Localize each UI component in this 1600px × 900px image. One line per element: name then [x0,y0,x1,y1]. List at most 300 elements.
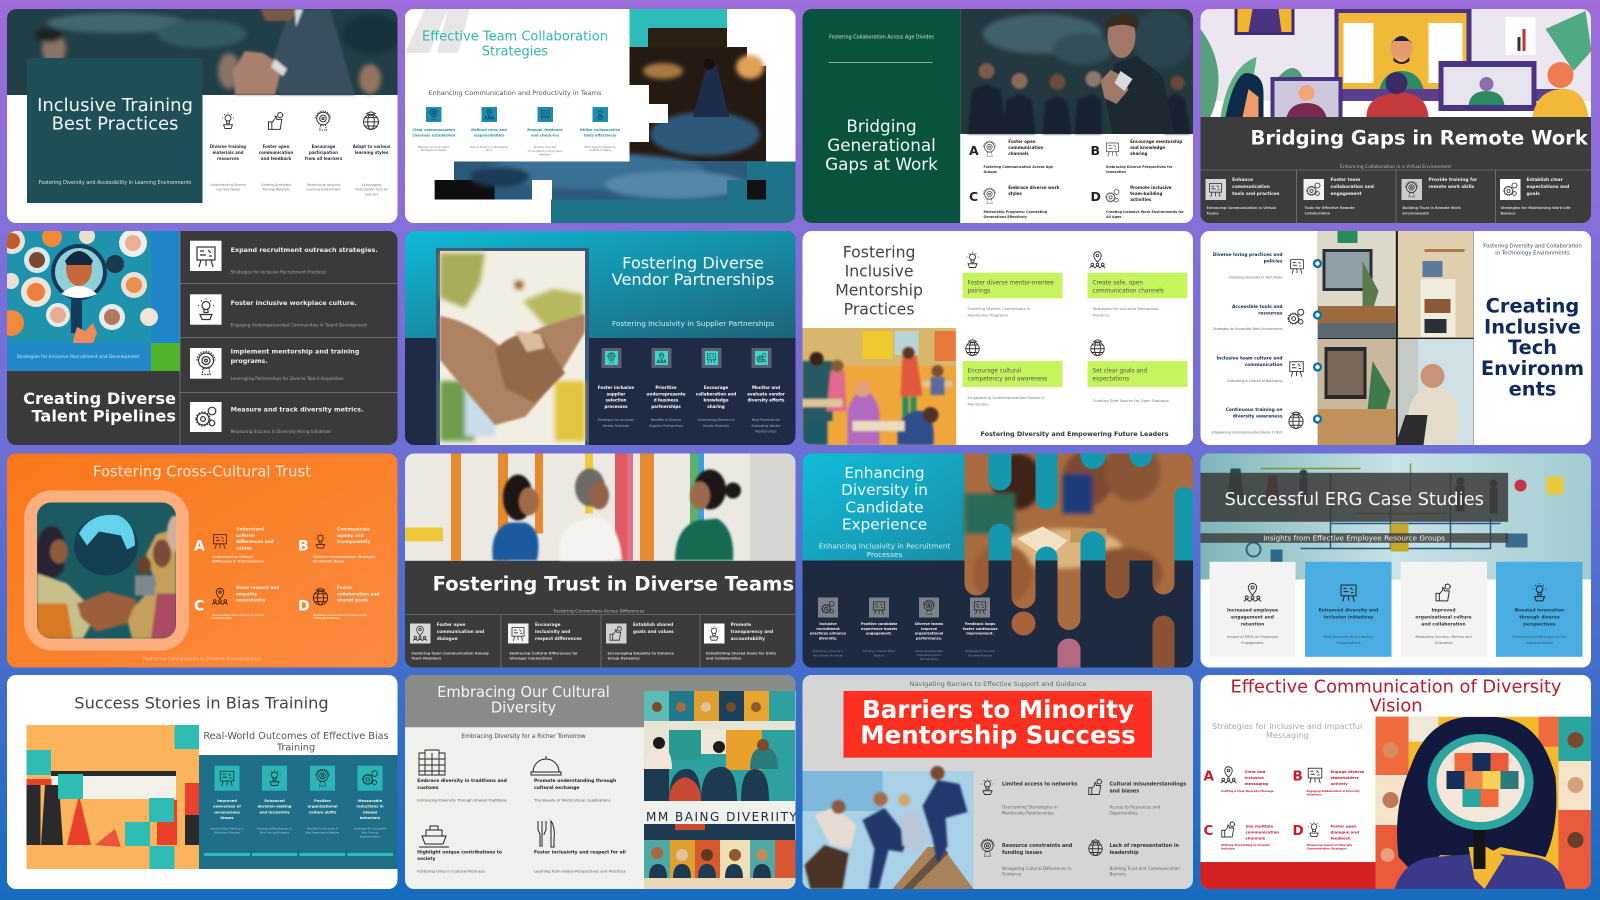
title: Generational [827,135,936,155]
heading: inclusion initiatives [1324,615,1374,621]
note: All Ages [1106,215,1121,219]
heading: and biases [1110,788,1139,794]
title banner [844,691,1152,758]
note: Effective Communication Strategies [313,555,376,559]
item: decision-making [252,766,297,856]
marker [1314,364,1321,370]
note: Mentorship Relationships [1002,810,1053,816]
heading: Foster open [1008,139,1036,144]
icon tile [1500,179,1520,200]
subtitle: Fostering Diversity and Accessibility in Learning Environments [39,180,192,186]
heading: cultural [236,533,255,539]
heading: Improved [217,799,237,803]
heading: through diverse [1519,615,1560,621]
note: Strategies for Inclusive Mentorship [1092,306,1159,311]
item: supplier selection [598,348,634,428]
heading: knowledge [703,398,729,403]
note: Practices [1092,312,1110,317]
marker [1314,416,1321,422]
heading: Increased employee [1227,608,1278,614]
item D [1090,185,1184,219]
heading: Expand recruitment outreach strategies. [231,246,378,254]
icon [212,588,228,605]
note: Group Dynamics [608,657,640,661]
note: Teams [1206,212,1219,216]
heading: Positive [314,799,331,803]
item: safe channels [1088,252,1188,317]
label bar [1088,361,1188,387]
note: Generations Effectively [984,215,1028,219]
note: Barriers [1110,872,1126,877]
icon: fork and knife [538,821,554,847]
outcomes panel [199,755,398,869]
icon [315,533,326,548]
heading: retention [1241,622,1264,628]
heading: tools and practices [1232,191,1280,197]
heading: awareness of [213,805,241,809]
icon [1436,583,1451,601]
note: Strategies for Successful [354,826,386,830]
item: open communication [259,112,293,192]
icon [1290,362,1303,377]
note: Evaluating Vendor [751,424,781,428]
note: Strategies for Accessible Work Environments [1213,327,1283,331]
item C [969,185,1060,219]
heading: Embrace diversity in traditions and [417,778,507,784]
heading: Embrace diverse work [1008,185,1060,190]
note: Building Long-lasting Relationships [313,613,367,617]
heading: Foster open [1330,824,1357,828]
text: channels established [412,133,455,137]
label bar [962,273,1062,298]
title: Environm [1481,357,1584,380]
heading: practices enhance [810,632,847,636]
heading: Improved [1431,608,1456,614]
note: Learning Environment [306,188,341,192]
note: Learning Needs [216,188,240,192]
image: professionals climbing stairs [802,766,974,889]
heading: Provide training for [1428,177,1478,183]
icon: ship [419,826,449,847]
grid lines [405,614,796,668]
item: reduced biased behaviors [348,766,393,856]
heading: underrepresente [647,391,686,396]
heading: engagement [1330,191,1362,197]
heading: communication and [437,629,484,635]
heading: diversity. [819,636,837,640]
letter: C [969,189,978,204]
heading: team-building [1130,191,1162,196]
heading: channels [1246,836,1266,840]
title: Embracing Our Cultural [437,684,610,701]
kicker: in Technology Environments [1495,250,1570,256]
grid lines [1200,170,1592,223]
heading: transparency and [731,629,773,635]
heading: biased [363,810,377,814]
note: Collaboration [1304,212,1331,216]
note: Embracing Diversity Through Shared Traditions [417,798,507,802]
note: Accountability Among Team [528,149,563,153]
heading: Show respect and [236,585,279,591]
label bar: Create safe, open [1092,280,1143,286]
icon [1091,340,1104,356]
band: subtitle strip: Strategies for Inclusive Recruitment and Development [17,354,139,360]
text: participation [309,150,338,155]
note: Empowering Underrepresented Voices in Tech [1212,430,1283,434]
note: Strategies for Inclusive [965,649,995,653]
note: Enhancing Inclusivity in [813,649,844,653]
title: Best Practices [52,114,178,135]
left title panel [802,9,960,223]
text: communication [259,150,293,155]
panel: Effective Communication of Diversity Vision [1200,675,1592,890]
icon tile [606,624,626,644]
item: adapt to learning styles [353,112,391,196]
letter: B [298,538,309,554]
note: Building Trust in Remote Work [1402,206,1462,210]
panel: Successful ERG Case Studies [1200,454,1592,668]
item: unique contributions [417,826,502,874]
item: misunderstandings [1089,779,1186,816]
item D [1292,822,1359,850]
icon [1244,583,1261,602]
heading: communication [1232,184,1270,190]
image frame [24,490,189,650]
heading: organizational [308,805,337,809]
note: Understanding Cultural [212,555,253,559]
note: Collaboration [212,616,232,620]
heading: biases [220,816,234,820]
heading: dialogue and [1330,830,1359,834]
subtitle: Real-World Outcomes of Effective Bias [203,731,389,742]
icon tile [310,766,335,791]
note: Organizations [1336,641,1361,645]
divider [828,61,932,64]
icon tile [358,766,382,791]
subtitle band [1200,533,1508,543]
illustration: woman with magnifier over faces [1376,717,1592,890]
note: Learning from Global Perspectives and Practices [534,868,626,874]
marker [1314,312,1321,318]
accent bar [348,853,393,856]
heading: Highlight unique contributions to [417,850,502,856]
heading: differences and [236,539,274,545]
heading: Clear and [1244,769,1266,774]
card: boosted innovation [1496,562,1582,657]
icon tile [508,624,528,644]
accent bar [252,853,297,856]
note: Through Empathy [313,616,340,620]
letter: B [1292,768,1303,784]
subtitle: Embracing Diversity for a Richer Tomorrow [461,734,586,740]
heading: partnerships [651,404,681,409]
heading: Communicate [337,526,370,532]
icon tile [190,241,222,271]
heading: dialogue [437,636,458,642]
kicker: Fostering Collaboration Across Age Divides [829,34,934,40]
heading: inclusivity and [535,629,570,635]
subtitle: Enhancing Communication and Productivity in Teams [429,89,602,97]
note: Creating Accessible [261,183,291,187]
heading: Encourage [704,385,728,390]
heading: Enhanced [264,799,285,803]
heading: recruitment [816,627,840,631]
title: Candidate [845,498,924,516]
note: Engaging Underrepresented Communities in Talent Development [231,322,367,328]
heading: Encourage mentorship [1130,139,1182,144]
icon tile [869,598,889,618]
grid lines [180,231,398,445]
note: Implementation [1526,641,1553,645]
heading: Foster team [1330,177,1361,183]
note: Strategies for Maintaining Work-Life [1500,206,1571,210]
marker [1314,260,1321,267]
label bar: competency and awareness [968,376,1047,382]
icon [1341,585,1356,602]
note: Outcomes [1435,641,1453,645]
note: Innovation [1106,170,1127,174]
icon [1291,260,1303,274]
icon tile [190,294,222,325]
item: accessible tools [1213,304,1321,331]
header band [405,675,796,727]
icon [981,839,994,856]
item A [1204,767,1274,793]
note: Learners [365,192,379,196]
heading: Enhance [1232,177,1253,183]
label bar: expectations [1092,376,1129,382]
label bar: pairings [968,288,990,294]
panel: Enhancing Diversity in Candidate Experience [802,442,1194,678]
item: access to networks [982,779,1077,816]
heading: communication [1246,830,1279,834]
item: recruitment practices [810,598,847,657]
text: Clear communication [412,128,455,132]
heading: customs [417,785,439,791]
note: Fostering Communication Across Age [984,165,1054,169]
heading: shared goals [337,598,369,604]
heading: supplier [607,391,625,396]
heading: improve [921,627,938,631]
heading: channels [1008,151,1029,156]
heading: Monitor and [752,385,780,390]
text: responsibilities [473,133,505,137]
heading: consistently [236,598,266,604]
heading: engagement and [1231,615,1274,621]
note: Overcoming Stereotypes to Foster [212,613,265,617]
item: collaborative tools [580,107,621,152]
item: shared goals [606,622,675,661]
heading: Inclusive team culture and [1217,356,1282,362]
item: monitor efforts [747,348,785,434]
title: Inclusive [1484,315,1581,338]
heading: behaviors [360,816,381,820]
note: Differences in Trust Dynamics [212,559,264,563]
subtitle: Enhancing Collaboration in a Virtual Environment [1340,164,1451,170]
heading: unconscious [214,810,241,814]
note: Demographics [920,657,939,661]
heading: Cultural misunderstandings [1110,782,1186,788]
letter: A [969,143,979,158]
heading: foster continuous [963,627,998,631]
item: diverse teams [915,598,943,661]
heading: Continuous training on [1226,407,1282,413]
text: learning styles [355,150,389,155]
item: candidate experience [861,598,898,657]
icon [214,535,226,549]
heading: leadership [1110,850,1139,856]
note: Recruitment Processes [813,653,843,657]
note: Conflicts in Teams [589,148,612,152]
text: and check-ins [531,133,559,137]
icon tile [919,598,939,618]
icon: service bell [531,756,561,775]
heading: decision-making [257,805,292,809]
panel: Effective Team Collaboration Strategies [405,9,796,224]
title: Gaps at Work [825,154,938,174]
note: Mentorship Programs: Connecting [984,210,1048,214]
item: cultural competency [962,340,1062,406]
heading: Foster open [437,622,466,628]
heading: openly and [337,533,364,539]
note: Members [539,153,551,157]
note: Team Members [412,657,441,661]
icon [1090,252,1105,268]
item: cultural exchange [531,756,616,802]
heading: messaging [1244,781,1268,786]
heading: Accessible tools and [1232,304,1282,310]
heading: diversity awareness [1233,413,1283,419]
heading: communication [1008,145,1044,150]
decorative quote mark [405,9,470,53]
note: Embracing Cultural Differences for [510,651,578,655]
heading: organizational culture [1415,615,1472,621]
heading: reductions in [356,805,384,809]
heading: cultural exchange [534,785,579,791]
note: Engagement [1241,641,1264,645]
note: Impact of ERGs on Employee [1227,635,1278,639]
note: Fostering Diversity in Tech Roles [1229,276,1283,280]
item: team collaboration [1304,177,1374,216]
item: diverse training materials [210,113,246,192]
icon: building [419,750,445,775]
icon tile [482,107,497,122]
subtitle: Fostering Inclusivity in Supplier Partnerships [612,319,774,328]
title: Fostering Diverse [622,254,764,272]
text: materials and [212,150,244,155]
item: inclusivity [508,622,582,661]
heading: perspectives [1523,622,1556,628]
heading: Promote inclusive [1130,185,1172,190]
title: Success Stories in Bias Training [74,694,329,712]
heading: and inclusivity [259,810,290,814]
note: Enhancing Communication in Virtual [1206,206,1276,210]
panel: Inclusive Training Best Practices [7,9,402,223]
icon [1221,767,1236,783]
heading: culture shifts [309,810,337,814]
heading: Prioritize [655,385,677,390]
heading: stakeholders [1330,775,1360,780]
heading: Implement mentorship and training [231,347,360,355]
item: defined roles [470,107,509,152]
heading: Diverse hiring practices and [1213,252,1282,258]
note: Vendor Selection [603,424,629,428]
note: Measuring Impact of Diversity [1306,843,1353,847]
item: open dialogue [410,622,489,661]
card: diversity initiatives [1305,562,1392,657]
label bar [962,361,1062,387]
note: Initiatives [1306,792,1322,796]
heading: collaboration and [1330,184,1374,190]
icon: thumb [268,112,284,129]
heading: Foster inclusive workplace culture. [231,299,357,307]
heading: Feedback loops [965,622,995,626]
subtitle: Training [276,743,315,754]
note: Groups [984,170,997,174]
note: Vendor Diversity [703,424,729,428]
note: Measuring Success: Metrics and [1415,635,1472,639]
panel: Bridging Gaps in Remote Work [1200,9,1592,223]
item B [1090,139,1182,174]
row: expand outreach [190,241,378,274]
heading: accountability [731,636,765,642]
note: Fostering Unity in Cultural Richness [417,868,485,874]
panel: Embracing Our Cultural Diversity [405,675,798,890]
white text panel [405,9,668,162]
text: resources [217,156,240,161]
panel: Fostering Cross-Cultural Trust [7,454,398,668]
icon tile [214,766,240,791]
item: transparency [704,622,777,661]
item: regular feedback [527,107,563,157]
heading: remote work skills [1428,184,1475,190]
note: Effective Communication [418,145,450,149]
icon [1089,840,1102,856]
row: track metrics [190,402,363,434]
icon tile [190,348,222,379]
note: Establishing Shared Goals for Unity [706,651,777,655]
heading: selection [606,398,627,403]
heading: Diverse teams [915,622,943,626]
note: Encouraging Empathy to Enhance [608,651,675,655]
title: Fostering [843,242,915,262]
note: Impact of Bias Training on [210,826,244,830]
heading: Use multiple [1246,824,1273,828]
item: traditions [417,750,507,802]
text: from all learners [305,156,343,161]
note: Stronger Connections [510,657,552,661]
note: Encouraging [362,183,381,187]
item C [194,585,279,620]
note: Balance [1500,212,1516,216]
text: Defined roles and [471,128,507,132]
panel: Creating Diverse Talent Pipelines [0,227,398,445]
heading: organizational [915,632,943,636]
image: handshake over world map [436,248,589,445]
note: Tools for Effective Remote [1304,206,1355,210]
panel: Barriers to Minority Mentorship Success [802,675,1194,890]
item: culture shifts [300,766,345,856]
title: Mentorship [835,280,923,300]
heading: experience boosts [861,627,897,631]
note: Understanding Diverse [210,183,246,187]
title band [1200,473,1508,522]
title: ents [1509,378,1556,401]
label bar [1088,273,1188,298]
item: mentor pairings [962,252,1062,317]
note: Overcoming Challenges in ERG [1512,635,1567,639]
heading: Resource constraints and [1002,843,1073,849]
